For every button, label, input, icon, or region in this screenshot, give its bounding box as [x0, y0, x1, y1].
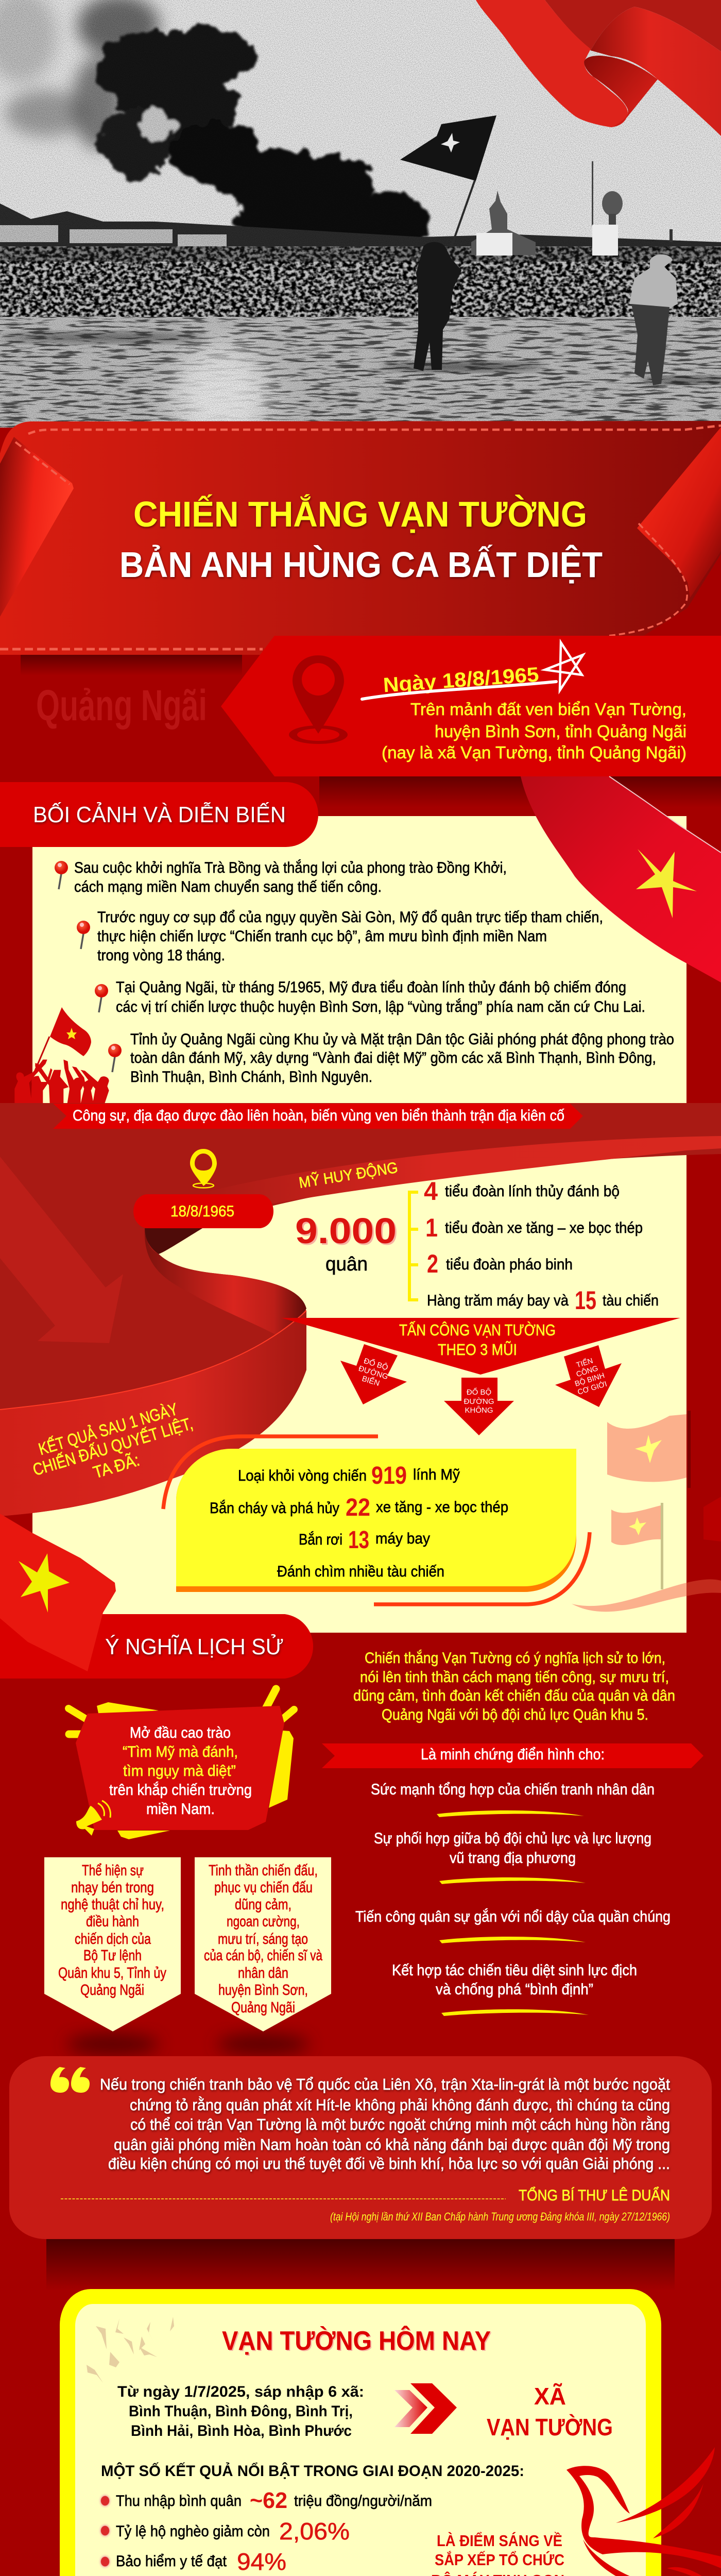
- quote attribution: [61, 2187, 670, 2223]
- arrow: sea landing: ĐƯỜNG: [357, 1364, 389, 1381]
- big down arrow on ribbon: [0, 1157, 123, 1343]
- ribbon text: Kết quả: KẾT QUẢ SAU 1 NGÀY: [36, 1399, 180, 1459]
- stat: poverty: [98, 2518, 350, 2545]
- result: 22 tanks: [210, 1494, 508, 1521]
- evidence list: [355, 1781, 671, 2016]
- stat: 9.000 troops: 9.000: [297, 1212, 398, 1252]
- pennant: command art: Bộ Tư lệnh: [83, 1947, 142, 1964]
- icon: waving flag left: [0, 1514, 116, 1671]
- evidence list: Tiến công quân sự gắn với nổi dậy của quần chúng: [355, 1908, 671, 1925]
- ribbon: Là minh chứng: Là minh chứng điển hình cho:: [421, 1746, 605, 1763]
- callout text: “Tìm Mỹ mà đánh,: [123, 1743, 238, 1760]
- attack triangle: THEO 3 MŨI: [438, 1341, 517, 1359]
- arrow: sea landing: [340, 1344, 407, 1404]
- stat: health insurance: [98, 2548, 286, 2575]
- forces list with bracket: [409, 1177, 659, 1315]
- pennant: command art: điều hành: [86, 1913, 139, 1930]
- arrow: mechanized infantry: BỘ BINH: [574, 1371, 606, 1388]
- pennant: fighting spirit: [195, 1857, 331, 2031]
- arrow: sea landing: BIỂN: [361, 1374, 381, 1388]
- panel: Vạn Tường today: [60, 2289, 661, 2576]
- panel: megaphone callout: [68, 1689, 294, 1839]
- item 3: [95, 979, 645, 1015]
- section heading: Bối cảnh và diễn biến: [0, 782, 318, 847]
- forces list with bracket: tiểu đoàn xe tăng – xe bọc thép: [445, 1219, 643, 1236]
- ribbon dark background: [545, 0, 721, 52]
- ribbon strip: [591, 7, 721, 136]
- pennant: fighting spirit: huyện Bình Sơn,: [218, 1982, 308, 1998]
- section heading: Bối cảnh và diễn biến: BỐI CẢNH VÀ DIỄN BIẾN: [33, 801, 286, 827]
- pennant: command art: Thể hiện sự: [82, 1862, 144, 1879]
- icon: quote marks: [50, 2067, 90, 2093]
- forces list with bracket: 15: [575, 1286, 596, 1315]
- ribbon callout: Công sự: Công sự, địa đạo được đào liên hoàn, biến vùng ven biển thành trận địa kiên cố: [73, 1107, 564, 1124]
- item 3: Tại Quảng Ngãi, từ tháng 5/1965, Mỹ đưa tiểu đoàn lính thủy đánh bộ chiếm đóng: [116, 979, 626, 996]
- merged communes text: Bình Thuận, Bình Đông, Bình Trị,: [129, 2403, 353, 2420]
- monuments in the distance: [471, 161, 673, 256]
- panel title: VẠN TƯỜNG HÔM NAY: [222, 2326, 491, 2356]
- callout text: Mở đầu cao trào: [130, 1724, 231, 1741]
- item 1: Sau cuộc khởi nghĩa Trà Bồng và thắng lợi của phong trào Đồng Khởi,: [74, 859, 507, 876]
- forces list with bracket: Hàng trăm máy bay và: [427, 1292, 569, 1309]
- callout text: trên khắp chiến trường: [109, 1782, 252, 1799]
- stat: poverty: Tỷ lệ hộ nghèo giảm còn: [116, 2523, 270, 2540]
- evidence list: Kết hợp tác chiến tiêu diệt sinh lực địch: [392, 1962, 637, 1979]
- evidence list: và chống phá “bình định”: [436, 1981, 593, 1998]
- arrow: air landing: ĐƯỜNG: [464, 1397, 494, 1406]
- highlight text: [418, 2532, 581, 2576]
- pennant: fighting spirit: ngoan cường,: [227, 1913, 300, 1930]
- ribbon main band: [476, 0, 628, 127]
- ribbon body: dark curving band: [0, 1103, 721, 1516]
- commune name: [487, 2383, 613, 2441]
- callout text: tìm ngụy mà diệt”: [123, 1762, 236, 1780]
- forces list with bracket: tiểu đoàn lính thủy đánh bộ: [445, 1183, 620, 1200]
- evidence list: Sức mạnh tổng hợp của chiến tranh nhân dân: [371, 1781, 655, 1798]
- item 4: toàn dân đánh Mỹ, xây dựng “Vành đai diệt Mỹ” gồm các xã Bình Thạnh, Bình Đông,: [130, 1049, 656, 1066]
- pennant: command art: nghệ thuật chỉ huy,: [61, 1896, 164, 1913]
- result: 22 tanks: Bắn cháy và phá hủy: [210, 1500, 339, 1517]
- arrow: mechanized infantry: CÔNG: [575, 1364, 599, 1379]
- panel: title banner: [0, 421, 721, 655]
- stat: 9.000 troops: 9.000: [295, 1211, 397, 1251]
- treeline and fence: [0, 204, 721, 246]
- top-right decorative ribbon: [476, 0, 721, 136]
- pennant: fighting spirit: mưu trí, sáng tạo: [218, 1931, 308, 1947]
- icon: megaphone: [76, 1801, 110, 1836]
- result: 919 soldiers: [238, 1462, 460, 1489]
- date heading: Ngày 18/8/1965: [383, 663, 540, 697]
- ribbon: Là minh chứng: [322, 1743, 703, 1768]
- attack triangle: TẤN CÔNG VẠN TƯỜNG: [399, 1321, 556, 1339]
- arrow: mechanized infantry: TIẾN: [575, 1357, 594, 1369]
- stat: income: [98, 2488, 432, 2513]
- ribbon S-curve: [145, 1228, 306, 1338]
- arrow: mechanized infantry: [555, 1345, 622, 1407]
- quote text: quân giải phóng miền Nam hoàn toàn có khả năng đánh bại được quân đội Mỹ trong: [114, 2136, 670, 2154]
- icon: birds: [87, 2317, 174, 2383]
- evidence list: Sự phối hợp giữa bộ đội chủ lực và lực lượng: [374, 1830, 651, 1847]
- panel: date arrow: [221, 636, 721, 776]
- title line 1: CHIẾN THẮNG VẠN TƯỜNG: [133, 494, 587, 534]
- quote attribution: TỔNG BÍ THƯ LÊ DUẨN: [519, 2187, 670, 2204]
- flag carried by soldier: [400, 115, 496, 247]
- stat: poverty: 2,06%: [279, 2518, 350, 2545]
- panel: quotation: [9, 2056, 712, 2239]
- result: 22 tanks: xe tăng - xe bọc thép: [376, 1499, 508, 1516]
- ribbon callout: Công sự: [53, 1104, 583, 1129]
- highlight text: LÀ ĐIỂM SÁNG VỀ: [437, 2532, 562, 2550]
- soldier with flag: [414, 242, 461, 371]
- ribbon text: Kết quả: CHIẾN ĐẤU QUYẾT LIỆT,: [30, 1414, 195, 1479]
- forces list with bracket: 1: [425, 1213, 438, 1242]
- item 1: cách mạng miền Nam chuyển sang thế tiến công.: [74, 878, 382, 895]
- icon: yellow location pin: [190, 1149, 217, 1188]
- item 4: Bình Thuận, Bình Chánh, Bình Nguyên.: [130, 1069, 372, 1086]
- shadow below banner: [21, 655, 242, 675]
- commune name: VẠN TƯỜNG: [487, 2414, 613, 2441]
- quote text: Nếu trong chiến tranh bảo vệ Tổ quốc của Liên Xô, trận Xta-lin-grát là một bước ngoặt: [100, 2075, 670, 2093]
- pennant: command art: Quảng Ngãi: [80, 1982, 144, 1998]
- evidence list: vũ trang địa phương: [450, 1850, 576, 1867]
- stat: health insurance: 94%: [237, 2548, 286, 2575]
- forces list with bracket: tiểu đoàn pháo binh: [446, 1256, 573, 1273]
- result: 919 soldiers: 919: [371, 1462, 407, 1489]
- item 2: thực hiện chiến lược “Chiến tranh cục bộ”, âm mưu bình định miền Nam: [97, 928, 547, 945]
- pennant: fighting spirit: phục vụ chiến đấu: [214, 1879, 313, 1896]
- title line 2: BẢN ANH HÙNG CA BẤT DIỆT: [119, 544, 603, 585]
- stat: income: Thu nhập bình quân: [116, 2493, 242, 2510]
- megaphone rays: [68, 1689, 294, 1734]
- stat: 9.000 troops: quân: [325, 1253, 368, 1275]
- merged communes text: Từ ngày 1/7/2025, sáp nhập 6 xã:: [117, 2383, 364, 2400]
- red curtain with star: [521, 776, 721, 982]
- pennant: command art: chiến dịch của: [75, 1931, 151, 1947]
- arrow: air landing: KHÔNG: [465, 1406, 493, 1415]
- callout text: [109, 1724, 252, 1818]
- highlight text: SẮP XẾP TỔ CHỨC: [435, 2550, 564, 2569]
- significance paragraph: nói lên tinh thần cách mạng tiến công, sự mưu trí,: [360, 1669, 669, 1686]
- location text: Trên mảnh đất ven biển Vạn Tường,: [410, 700, 686, 719]
- icon: red dove flourish: [566, 2447, 721, 2576]
- icon: flag and crowd silhouette: [14, 1007, 109, 1104]
- ribbon text: Kết quả: TA ĐÃ:: [91, 1450, 142, 1482]
- results heading: MỘT SỐ KẾT QUẢ NỔI BẬT TRONG GIAI ĐOẠN 2020-2025:: [101, 2462, 524, 2480]
- pennant: fighting spirit: của cán bộ, chiến sĩ và: [204, 1947, 323, 1964]
- quote text: [100, 2075, 670, 2173]
- result: 13 aircraft: Bắn rơi: [299, 1531, 342, 1548]
- decorative orange lines around results: [163, 1436, 590, 1604]
- pennant: fighting spirit: Tinh thần chiến đấu,: [209, 1862, 318, 1879]
- stat: income: ~62: [250, 2488, 287, 2513]
- pennant: fighting spirit: dũng cảm,: [235, 1896, 291, 1913]
- left fold of banner: [0, 437, 74, 617]
- right fold of banner: [637, 427, 721, 598]
- quote text: chứng tỏ rằng quân phát xít Hít-le không phải không đánh được, thì chúng ta cũng: [130, 2096, 670, 2114]
- stat: health insurance: Bảo hiểm y tế đạt: [116, 2553, 227, 2570]
- icon: yellow star: [636, 849, 697, 918]
- shadows under pennants: [66, 2034, 310, 2055]
- panel title: VẠN TƯỜNG HÔM NAY: [223, 2327, 492, 2357]
- yellow backing shapes: [97, 1702, 294, 1839]
- grass band: [0, 246, 721, 321]
- second soldier: [629, 255, 678, 385]
- result: 13 aircraft: [299, 1527, 430, 1554]
- hero photo: battlefield with flag and soldiers: [0, 0, 721, 448]
- arrow: sea landing: ĐỔ BỘ: [363, 1356, 389, 1372]
- result: 919 soldiers: lính Mỹ: [413, 1466, 460, 1483]
- result: 919 soldiers: Loại khỏi vòng chiến: [238, 1467, 367, 1484]
- result: 13 aircraft: 13: [348, 1527, 369, 1554]
- pennant: command art: [44, 1857, 181, 2031]
- forces list with bracket: 2: [427, 1249, 438, 1278]
- result: 22 tanks: 22: [346, 1494, 370, 1521]
- significance paragraph: Chiến thắng Vạn Tường có ý nghĩa lịch sử to lớn,: [365, 1650, 665, 1667]
- shadow under quote: [46, 2239, 675, 2291]
- item 3: các vị trí chiến lược thuộc huyện Bình Sơn, lập “vùng trắng” phía nam căn cứ Chu Lai.: [116, 998, 645, 1015]
- item 1: [55, 859, 507, 895]
- icon: map pin: [289, 655, 348, 744]
- panel: yellow results box: [176, 1449, 576, 1592]
- result: warships sunk: Đánh chìm nhiều tàu chiến: [277, 1563, 444, 1580]
- icon: hand-drawn star and underline: [362, 642, 583, 699]
- callout text: miền Nam.: [146, 1801, 215, 1818]
- arrow: air landing: [444, 1378, 514, 1435]
- upper ribbon band: [198, 1136, 721, 1206]
- ribbon flap: [584, 56, 658, 127]
- date pill: 18/8/1965: [170, 1203, 234, 1220]
- pennant: fighting spirit: Quảng Ngãi: [231, 1999, 295, 2016]
- panel: date arrow: huyện Bình Sơn, tỉnh Quảng Ngãi: [435, 722, 686, 741]
- stat: 9.000 troops: [295, 1211, 398, 1275]
- icon: double chevron: [394, 2383, 457, 2434]
- item 4: Tỉnh ủy Quảng Ngãi cùng Khu ủy và Mặt trận Dân tộc Giải phóng phát động phong trào: [130, 1031, 674, 1048]
- significance paragraph: Quảng Ngãi với bộ đội chủ lực Quân khu 5.: [382, 1706, 648, 1723]
- ribbon twist dark: [145, 1228, 202, 1254]
- quote text: có thể coi trận Vạn Tường là một bước ngoặt chứng minh một cách hùng hồn rằng: [130, 2115, 670, 2133]
- merged communes text: [117, 2383, 364, 2439]
- list: context events: [55, 859, 674, 1086]
- faded logo left: Quảng Ngãi: [36, 681, 207, 730]
- pennant: command art: nhạy bén trong: [71, 1879, 154, 1896]
- quote text: điều kiện chúng có mọi ưu thế tuyệt đối về binh khí, hỏa lực so với quân Giải phóng ...: [108, 2155, 670, 2173]
- pennant: fighting spirit: nhân dân: [238, 1965, 288, 1981]
- date pill: [133, 1194, 273, 1228]
- ground: [0, 317, 721, 428]
- arrow: mechanized infantry: CƠ GIỚI: [576, 1380, 608, 1397]
- item 2: [77, 909, 603, 964]
- section heading: Ý nghĩa lịch sử: Ý NGHĨA LỊCH SỬ: [105, 1633, 284, 1659]
- result: 13 aircraft: máy bay: [375, 1530, 430, 1547]
- lower ribbon band: [0, 1311, 306, 1516]
- item 2: Trước nguy cơ sụp đổ của ngụy quyền Sài Gòn, Mỹ đổ quân trực tiếp tham chiến,: [97, 909, 603, 926]
- panel: date arrow: (nay là xã Vạn Tường, tỉnh Quảng Ngãi): [382, 743, 686, 762]
- item 4: [108, 1031, 674, 1086]
- commune name: XÃ: [534, 2383, 566, 2410]
- shadow under date arrow: [319, 776, 721, 807]
- section heading: Ý nghĩa lịch sử: [0, 1614, 313, 1679]
- merged communes text: Bình Hải, Bình Hòa, Bình Phước: [131, 2422, 352, 2439]
- panel: cream content background: [32, 816, 686, 1633]
- forces list with bracket: tàu chiến: [603, 1292, 659, 1309]
- significance paragraph: [353, 1650, 675, 1723]
- stat: income: triệu đồng/người/năm: [294, 2493, 432, 2510]
- forces list with bracket: 4: [424, 1177, 438, 1206]
- arrow: air landing: ĐỔ BỘ: [467, 1387, 491, 1397]
- pale decorative flags: [572, 1411, 721, 1612]
- pennant: command art: Quân khu 5, Tỉnh ủy: [58, 1965, 166, 1981]
- attack triangle: [281, 1318, 680, 1375]
- significance paragraph: dũng cảm, tình đoàn kết chiến đấu của quân và dân: [353, 1687, 675, 1704]
- label: Mỹ huy động: MỸ HUY ĐỘNG: [298, 1159, 399, 1192]
- item 2: trong vòng 18 tháng.: [97, 947, 225, 964]
